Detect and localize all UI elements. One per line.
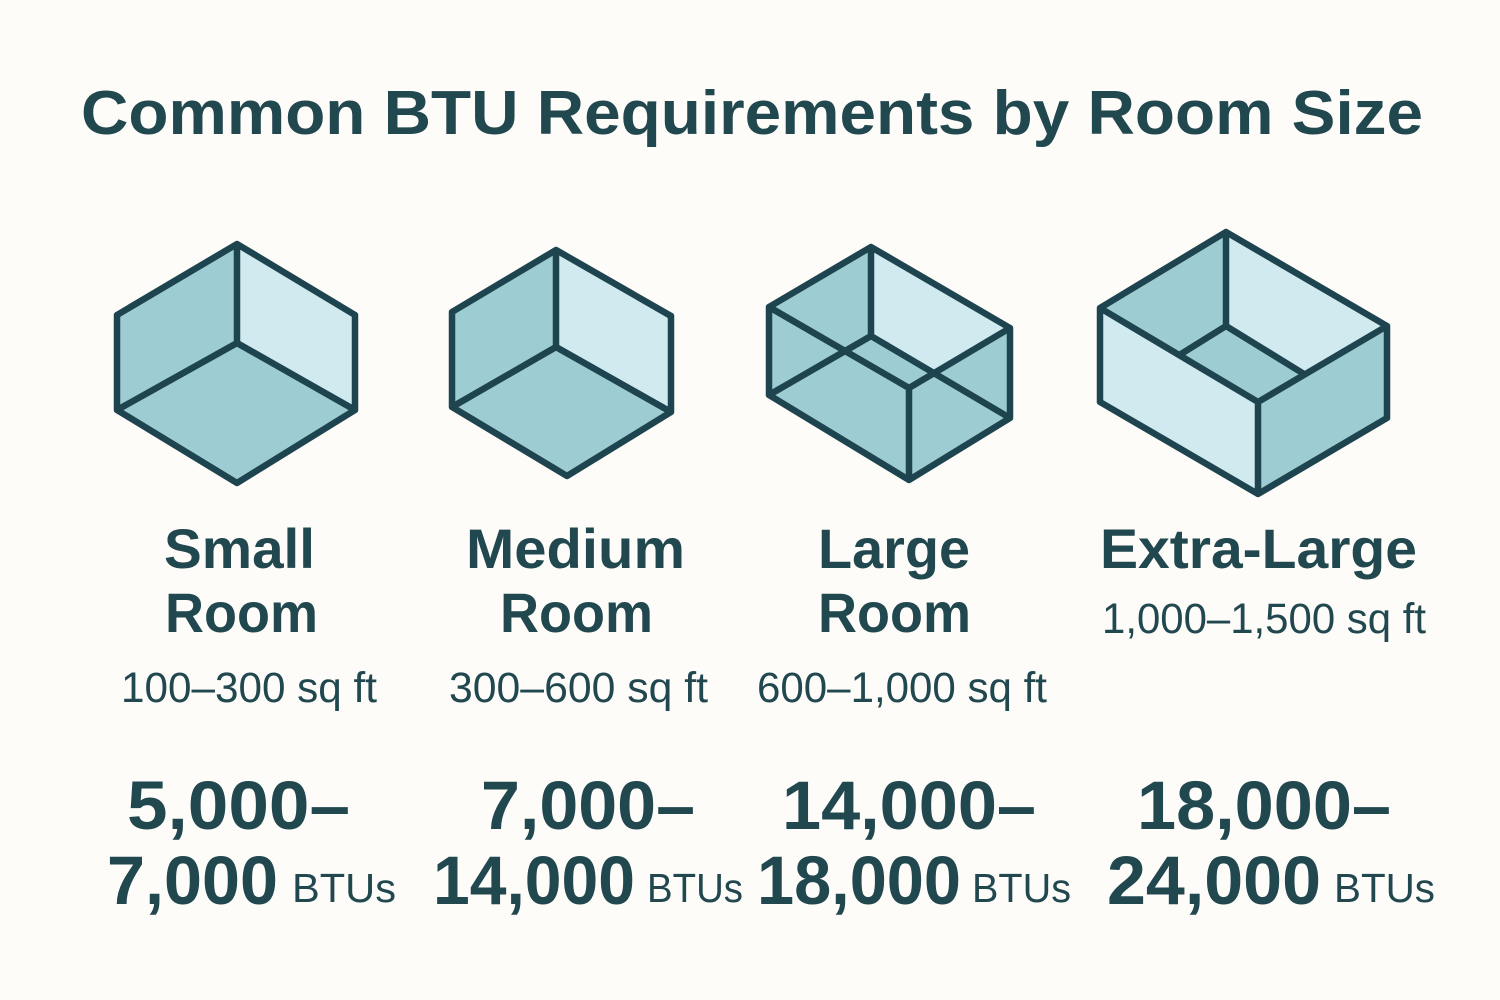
icon: large room (769, 247, 1010, 480)
btu range: large room: 18,000 (757, 842, 961, 919)
btu range: large room: 14,000– (782, 767, 1036, 844)
icon: medium room (452, 250, 671, 476)
btu range: small room (107, 767, 396, 919)
column: medium room (433, 250, 743, 919)
area: medium room: 300–600 sq ft (449, 664, 708, 712)
icon: small room (117, 244, 355, 483)
heading: medium room: Room (500, 581, 653, 644)
icon: extra-large room (1100, 232, 1387, 494)
column: small room (107, 244, 396, 919)
btu range: extra-large room: 24,000 (1107, 842, 1321, 919)
heading: small room: Small (164, 517, 315, 580)
heading: large room: Room (818, 581, 971, 644)
btu range: medium room (433, 767, 743, 919)
heading: extra-large room: Extra-Large (1100, 517, 1417, 580)
heading: small room: Room (165, 581, 318, 644)
btu range: medium room: 14,000 (433, 842, 635, 919)
column: large room (757, 247, 1071, 919)
btu range: extra-large room (1107, 767, 1435, 919)
btu range: small room: BTUs (292, 865, 396, 911)
btu range: small room: 5,000– (127, 767, 350, 844)
btu range: extra-large room: 18,000– (1137, 767, 1391, 844)
column: extra-large room (1100, 232, 1435, 919)
btu range: small room: 7,000 (107, 842, 278, 919)
btu range: medium room: BTUs (647, 865, 743, 911)
area: extra-large room: 1,000–1,500 sq ft (1102, 595, 1426, 643)
area: large room: 600–1,000 sq ft (757, 664, 1047, 712)
btu range: large room (757, 767, 1071, 919)
heading: medium room: Medium (466, 517, 685, 580)
title: Common BTU Requirements by Room Size (81, 79, 1423, 148)
btu range: extra-large room: BTUs (1334, 865, 1435, 911)
btu range: large room: BTUs (972, 865, 1071, 911)
heading: large room: Large (818, 517, 970, 580)
btu range: medium room: 7,000– (481, 767, 695, 844)
area: small room: 100–300 sq ft (121, 664, 377, 712)
